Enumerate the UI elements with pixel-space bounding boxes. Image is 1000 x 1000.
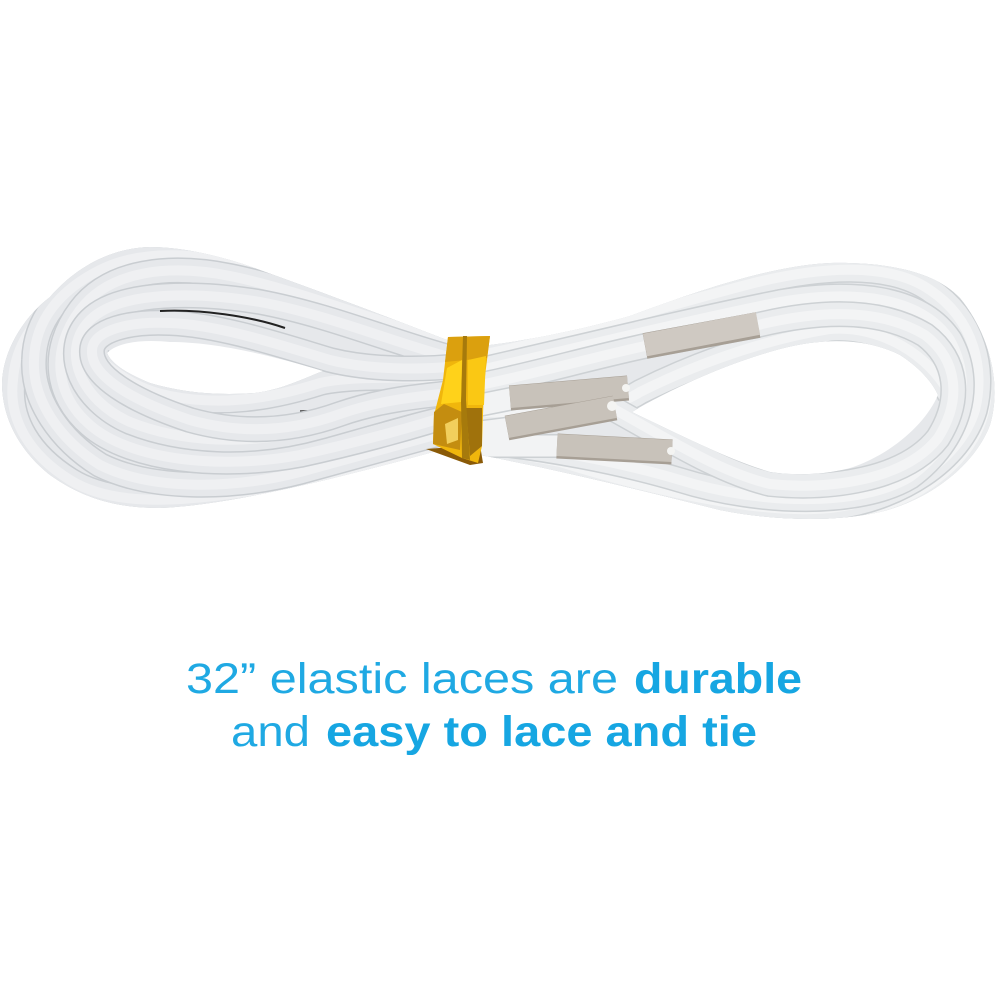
caption line 1: durable: [634, 655, 802, 703]
caption line 2: and: [231, 708, 310, 756]
right loop of laces: [480, 270, 986, 518]
aglet 3: [507, 401, 617, 428]
caption line 2: easy to lace and tie: [326, 708, 757, 756]
aglet 2: [510, 384, 630, 398]
aglet tips: [507, 324, 758, 455]
lace coil: [0, 240, 1000, 530]
caption: [186, 655, 802, 756]
lace strands: [0, 240, 1000, 530]
gold band: [426, 336, 490, 465]
caption line 1: 32” elastic laces are: [186, 655, 618, 703]
aglet 4: [557, 445, 675, 455]
left loop of laces: [12, 255, 460, 500]
aglet 1: [645, 324, 758, 346]
caption line 1: [186, 655, 802, 703]
